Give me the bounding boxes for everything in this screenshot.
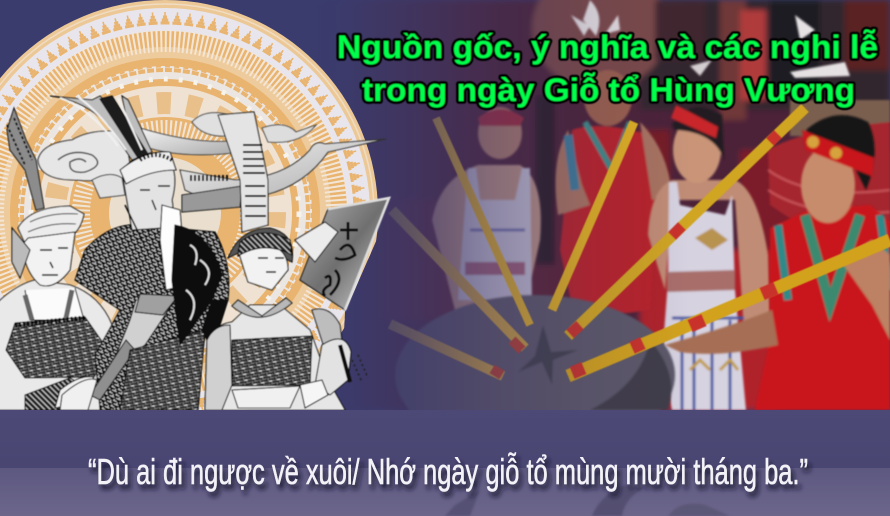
title <box>337 29 878 108</box>
right performer <box>665 115 890 410</box>
lower band <box>0 410 890 468</box>
background: navy base <box>0 0 890 410</box>
tablet <box>295 198 389 310</box>
feather decorations <box>570 0 852 80</box>
back centre performer <box>556 70 672 320</box>
photo backdrop <box>378 0 890 410</box>
female attendant <box>205 228 351 410</box>
king figure <box>50 96 229 410</box>
left attendant <box>0 108 140 410</box>
dotted ink marks <box>352 355 368 382</box>
drum top <box>396 294 676 410</box>
title line 2: trong ngày Giỗ tổ Hùng Vương <box>362 72 855 108</box>
medallion: bronze drum pattern <box>0 0 378 426</box>
left performer <box>432 107 541 330</box>
bamboo sticks <box>390 108 890 376</box>
left dark gradient overlay on photo <box>278 0 650 410</box>
lower band: lighter strip <box>0 468 890 516</box>
illustration: Hùng king and attendants <box>0 96 389 410</box>
faint lower illustration <box>445 485 730 516</box>
inner teeth ring <box>18 66 312 360</box>
outer teeth ring <box>0 14 364 412</box>
photo: drum ceremony performers <box>368 0 890 410</box>
middle performer <box>648 105 770 410</box>
title line 1: Nguồn gốc, ý nghĩa và các nghi lễ <box>337 29 878 65</box>
clouds and crane <box>38 112 386 232</box>
red drum at right <box>768 100 890 240</box>
